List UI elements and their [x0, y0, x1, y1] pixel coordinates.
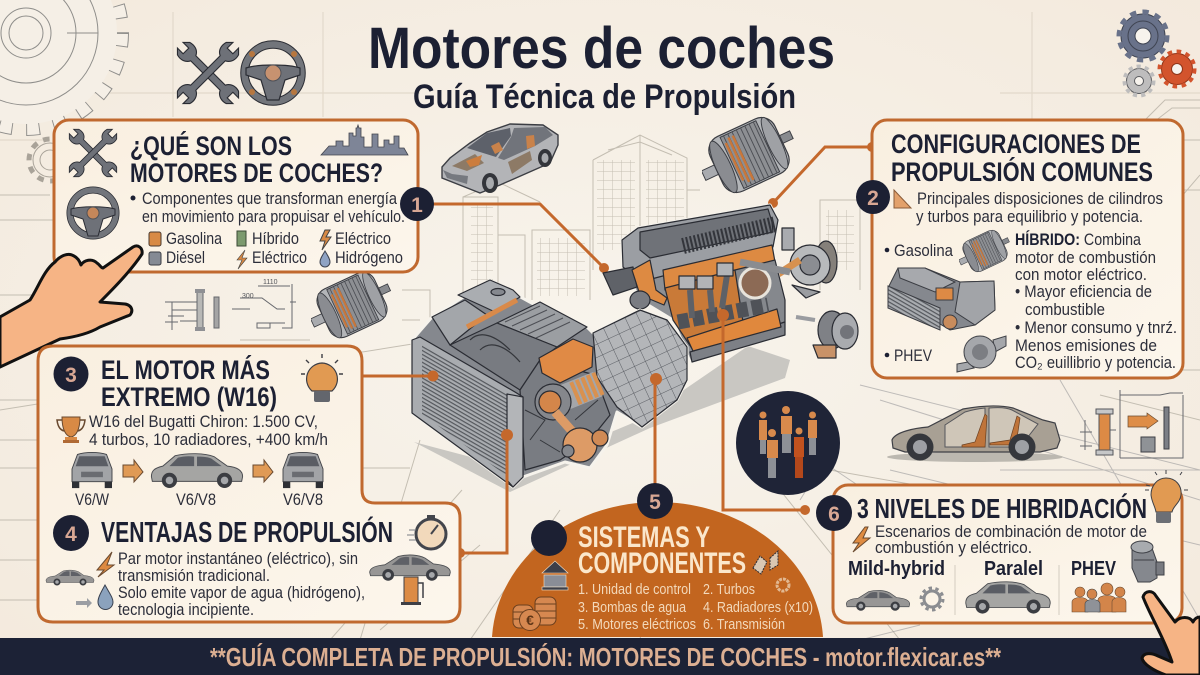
- component list: 4. Radiadores (x10): [703, 599, 813, 616]
- badge 4: 4: [65, 523, 77, 546]
- advantages description: transmisión tradicional.: [118, 567, 270, 585]
- heading: MOTORES DE COCHES?: [130, 158, 383, 188]
- car progression: V6/V8: [283, 491, 323, 509]
- icon: small car: [46, 570, 94, 586]
- transmission: [593, 310, 687, 427]
- bullet text: [130, 190, 405, 226]
- sketch: electric motor left: [302, 264, 400, 347]
- upper body: [432, 300, 487, 345]
- title: Motores de coches: [368, 16, 835, 81]
- icon: stopwatch: [407, 515, 446, 549]
- advantages description: Solo emite vapor de agua (hidrógeno),: [118, 584, 365, 602]
- panel: systems and components: [492, 502, 823, 637]
- icon: gears top-right: [1119, 12, 1194, 96]
- hybrid explanation: con motor eléctrico.: [1015, 266, 1147, 284]
- fuel legend: Gasolina: [166, 230, 223, 248]
- icon: steering wheel: [70, 190, 116, 236]
- badge 3: 3: [65, 364, 77, 387]
- sketch: technical diagram left: 1110: [263, 279, 278, 286]
- description: y turbos para equilibrio y potencia.: [916, 208, 1143, 226]
- heading W16: EL MOTOR MÁS: [101, 354, 270, 385]
- fuel legend: Eléctrico: [335, 230, 391, 248]
- radiator: [412, 337, 523, 487]
- heading: COMPONENTES: [578, 547, 746, 580]
- icon: car at fuel pump: [370, 555, 450, 605]
- hybrid explanation: • Mayor eficiencia de: [1015, 283, 1152, 301]
- car progression: V6/W: [75, 491, 109, 509]
- icon: coins: [513, 597, 556, 630]
- badge 4: [53, 515, 89, 551]
- turbo: [772, 228, 837, 298]
- icon: city skyline: [321, 125, 408, 155]
- icon: lightning: [853, 527, 870, 552]
- W16 description: 4 turbos, 10 radiadores, +400 km/h: [89, 431, 328, 449]
- panel: what are car engines: [54, 120, 418, 272]
- icon: turbo: [957, 336, 1006, 372]
- connector: 4: [455, 429, 513, 558]
- connector: 1: [433, 204, 609, 273]
- W16 description: [89, 413, 328, 449]
- icon: bank: [542, 561, 568, 590]
- decorative small outline gear: [29, 139, 71, 181]
- front unit: motor, transmission and radiator: [412, 280, 687, 487]
- blank badge: [531, 520, 567, 556]
- heading W16: [101, 354, 277, 412]
- description: Principales disposiciones de cilindros: [917, 190, 1163, 208]
- level labels: Mild-hybrid: [848, 558, 945, 580]
- panel: common configurations: [872, 120, 1183, 378]
- level labels: PHEV: [1071, 558, 1117, 580]
- W16 description: W16 del Bugatti Chiron: 1.500 CV,: [89, 413, 318, 431]
- advantages description: [118, 550, 365, 619]
- heading: [130, 130, 383, 188]
- icon: checker flags: [753, 551, 778, 574]
- heading W16: EXTREMO (W16): [101, 382, 277, 412]
- fuel legend: Hidrógeno: [335, 249, 403, 267]
- hybrid explanation: combustible: [1025, 301, 1105, 319]
- badge 1: [400, 187, 434, 221]
- fuel legend: [149, 230, 403, 269]
- coin euro sign: €: [526, 612, 534, 628]
- heading: [578, 521, 746, 580]
- connector: 3: [360, 370, 438, 382]
- crankshaft: [678, 263, 768, 322]
- panel: W16 engine and propulsion advantages: [38, 346, 460, 622]
- rear engine: [603, 205, 858, 362]
- hybrid explanation: • Menor consumo y tnrź.: [1015, 319, 1177, 337]
- heading: SISTEMAS Y: [578, 521, 710, 554]
- heading: [891, 129, 1153, 187]
- heading: ¿QUÉ SON LOS: [130, 130, 292, 161]
- icon: light bulb: [1145, 470, 1188, 523]
- hybrid explanation: HÍBRIDO: Combina: [1015, 230, 1142, 249]
- hybrid explanation: [1015, 230, 1177, 372]
- icon: light bulb: [301, 354, 343, 402]
- component list: 2. Turbos: [703, 581, 755, 598]
- advantages description: Par motor instantáneo (eléctrico), sin: [118, 550, 358, 568]
- fuel legend: Híbrido: [252, 230, 299, 248]
- description: [916, 190, 1163, 226]
- component list: [578, 581, 813, 633]
- hand pointer left: [0, 246, 142, 367]
- icon: arrow and water drop: [76, 585, 113, 610]
- intake: [603, 267, 637, 295]
- orange reservoir: [539, 339, 593, 383]
- outline halo: [412, 280, 687, 487]
- connector: 6: [717, 309, 810, 515]
- fuel legend: Eléctrico: [252, 249, 307, 267]
- connector: 5: [650, 373, 662, 490]
- badge 3: [54, 356, 88, 392]
- level labels: [848, 558, 1117, 580]
- heading advantages: VENTAJAS DE PROPULSIÓN: [101, 515, 393, 549]
- component list: 1. Unidad de control: [578, 581, 691, 598]
- badge 5: 5: [649, 491, 661, 514]
- hand pointer right: [1142, 592, 1200, 675]
- footer banner: [0, 638, 1200, 675]
- icon: turbo gear: [777, 579, 789, 591]
- badge 5: [637, 483, 673, 519]
- fuel legend: Diésel: [166, 249, 205, 267]
- hybrid explanation: CO₂ euillibrio y potencia.: [1015, 354, 1176, 372]
- icon: steering wheel header: [244, 44, 302, 102]
- sketch: technical diagram left: 300: [242, 293, 254, 300]
- description: combustión y eléctrico.: [875, 539, 1032, 557]
- icon: engine unit: [888, 268, 995, 330]
- heading: CONFIGURACIONES DE: [891, 129, 1141, 159]
- level labels: Paralel: [984, 558, 1043, 580]
- description: Escenarios de combinación de motor de: [875, 523, 1147, 541]
- sketch: electric motor top: [691, 108, 804, 203]
- icon: lightning: [97, 552, 114, 577]
- sketch: car right with orange seats: [887, 406, 1063, 462]
- hybrid explanation: motor de combustión: [1015, 249, 1156, 267]
- subtitle: Guía Técnica de Propulsión: [413, 78, 796, 116]
- description: [875, 523, 1147, 557]
- badge 6: 6: [828, 503, 840, 526]
- component list: 5. Motores eléctricos: [578, 616, 696, 633]
- car progression: [72, 452, 323, 509]
- panel: hybridization levels: [833, 470, 1188, 623]
- water pump: [796, 311, 858, 358]
- gasoline label: Gasolina: [894, 242, 954, 260]
- hybrid explanation: Menos emisiones de: [1015, 337, 1157, 355]
- footer banner: **GUÍA COMPLETA DE PROPULSIÓN: MOTORES DE COCHES - motor.flexicar.es**: [210, 642, 1002, 672]
- badge 6: [816, 495, 852, 531]
- badge 1: 1: [411, 194, 423, 217]
- icon: triangle ruler: [894, 190, 911, 208]
- pulleys: [553, 384, 598, 402]
- icon: motor: [953, 225, 1016, 278]
- component list: 3. Bombas de agua: [578, 599, 687, 616]
- car progression: V6/V8: [176, 491, 216, 509]
- bullet text: en movimiento para propuisar el vehículo.: [142, 208, 405, 226]
- connector: 2: [768, 142, 877, 208]
- engine ground shadow: [414, 346, 790, 492]
- icon: crossed wrenches header: [174, 39, 242, 107]
- level illustrations: [846, 565, 1126, 615]
- icon: turbine part: [1131, 541, 1164, 582]
- PHEV label: PHEV: [894, 347, 932, 365]
- icon: crossed wrenches: [66, 126, 120, 180]
- icon: people circle: [736, 391, 840, 495]
- sketch: car top with cutaway engine: [442, 124, 558, 193]
- badge 2: [856, 180, 890, 214]
- advantages description: tecnologia incipiente.: [118, 601, 254, 619]
- decorative large outline gear top-left: [0, 0, 122, 129]
- component list: 6. Transmisión: [703, 616, 785, 633]
- icon: trophy: [57, 417, 85, 443]
- bullet text: Componentes que transforman energía: [142, 190, 398, 208]
- badge 2: 2: [867, 187, 879, 210]
- sketch: technical diagram left: [165, 279, 296, 331]
- sketch: technical diagram right: [1080, 390, 1183, 458]
